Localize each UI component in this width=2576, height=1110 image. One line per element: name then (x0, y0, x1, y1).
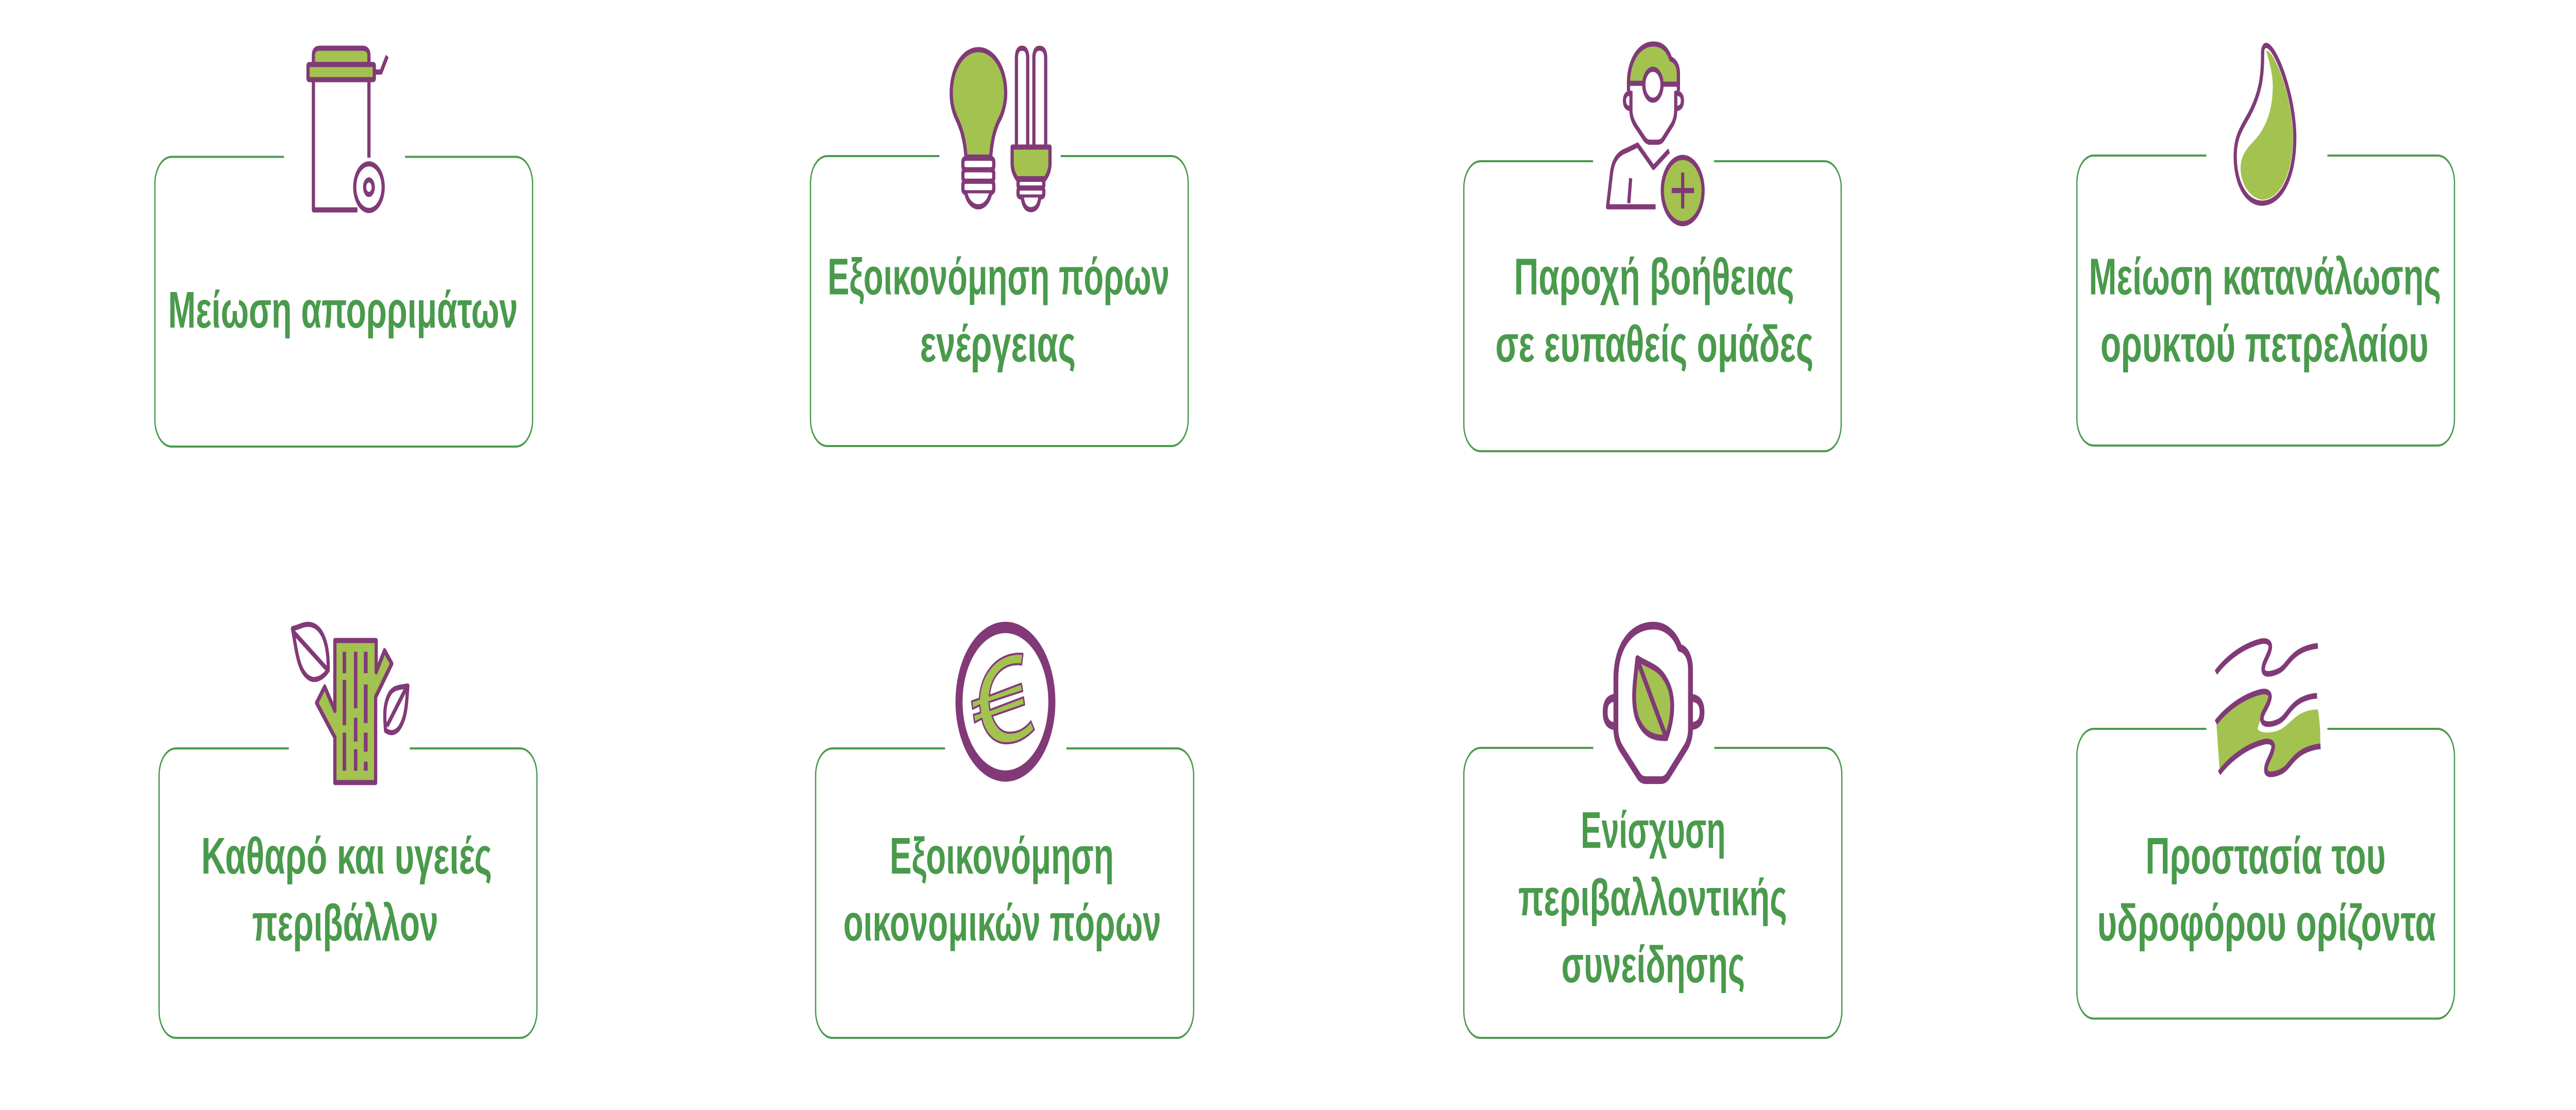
label: energy saving: Εξοικονόμηση πόρων (827, 248, 1170, 305)
panel: clean environment (159, 624, 537, 1038)
panel: energy saving (810, 48, 1188, 446)
box outline (155, 157, 533, 447)
label: waste reduction: Μείωση απορριμάτων (168, 281, 518, 339)
label: financial saving (843, 827, 1161, 952)
box outline (816, 748, 1194, 1038)
box outline (1464, 748, 1842, 1038)
icon: medic with plus (1607, 44, 1703, 224)
icon: water layers (2216, 641, 2320, 774)
label: help for vulnerable groups: σε ευπαθείς ομάδες (1495, 315, 1814, 373)
box outline (1464, 161, 1841, 451)
label: energy saving (827, 248, 1170, 373)
panel: waste reduction (155, 48, 533, 447)
label: oil consumption: ορυκτού πετρελαίου (2100, 315, 2429, 373)
label: clean environment: Καθαρό και υγειές (201, 827, 492, 885)
label: clean environment: περιβάλλον (252, 894, 438, 952)
label: environmental awareness: συνείδησης (1562, 936, 1745, 994)
icon: tree trunk and leaves (293, 624, 408, 782)
label: financial saving: οικονομικών πόρων (843, 894, 1161, 952)
box outline (2077, 156, 2454, 446)
panel: aquifer protection (2077, 641, 2454, 1019)
box outline (810, 156, 1188, 446)
label: help for vulnerable groups (1495, 248, 1814, 373)
label: environmental awareness: Ενίσχυση (1581, 801, 1725, 859)
icon: euro coin (959, 627, 1052, 776)
icon: waste bin (308, 48, 387, 211)
panel: help for vulnerable groups (1464, 44, 1841, 451)
label: energy saving: ενέργειας (920, 315, 1076, 373)
label: clean environment (201, 827, 492, 952)
label: environmental awareness (1518, 801, 1787, 994)
icon: head with leaf (1605, 626, 1702, 780)
label: aquifer protection: υδροφόρου ορίζοντα (2097, 894, 2436, 952)
label: aquifer protection (2097, 827, 2436, 952)
panel: oil consumption (2077, 45, 2454, 446)
label: oil consumption (2089, 248, 2441, 373)
icon: oil drop (2235, 45, 2295, 203)
box outline (2077, 729, 2454, 1019)
icon: light bulbs (951, 48, 1050, 210)
label: help for vulnerable groups: Παροχή βοήθειας (1514, 248, 1794, 305)
box outline (159, 748, 537, 1038)
panel: environmental awareness (1464, 626, 1842, 1038)
label: environmental awareness: περιβαλλοντικής (1518, 869, 1787, 927)
label: aquifer protection: Προστασία του (2145, 827, 2386, 885)
label: financial saving: Εξοικονόμηση (890, 827, 1114, 885)
label: oil consumption: Μείωση κατανάλωσης (2089, 248, 2441, 305)
panel: financial saving (816, 627, 1194, 1038)
